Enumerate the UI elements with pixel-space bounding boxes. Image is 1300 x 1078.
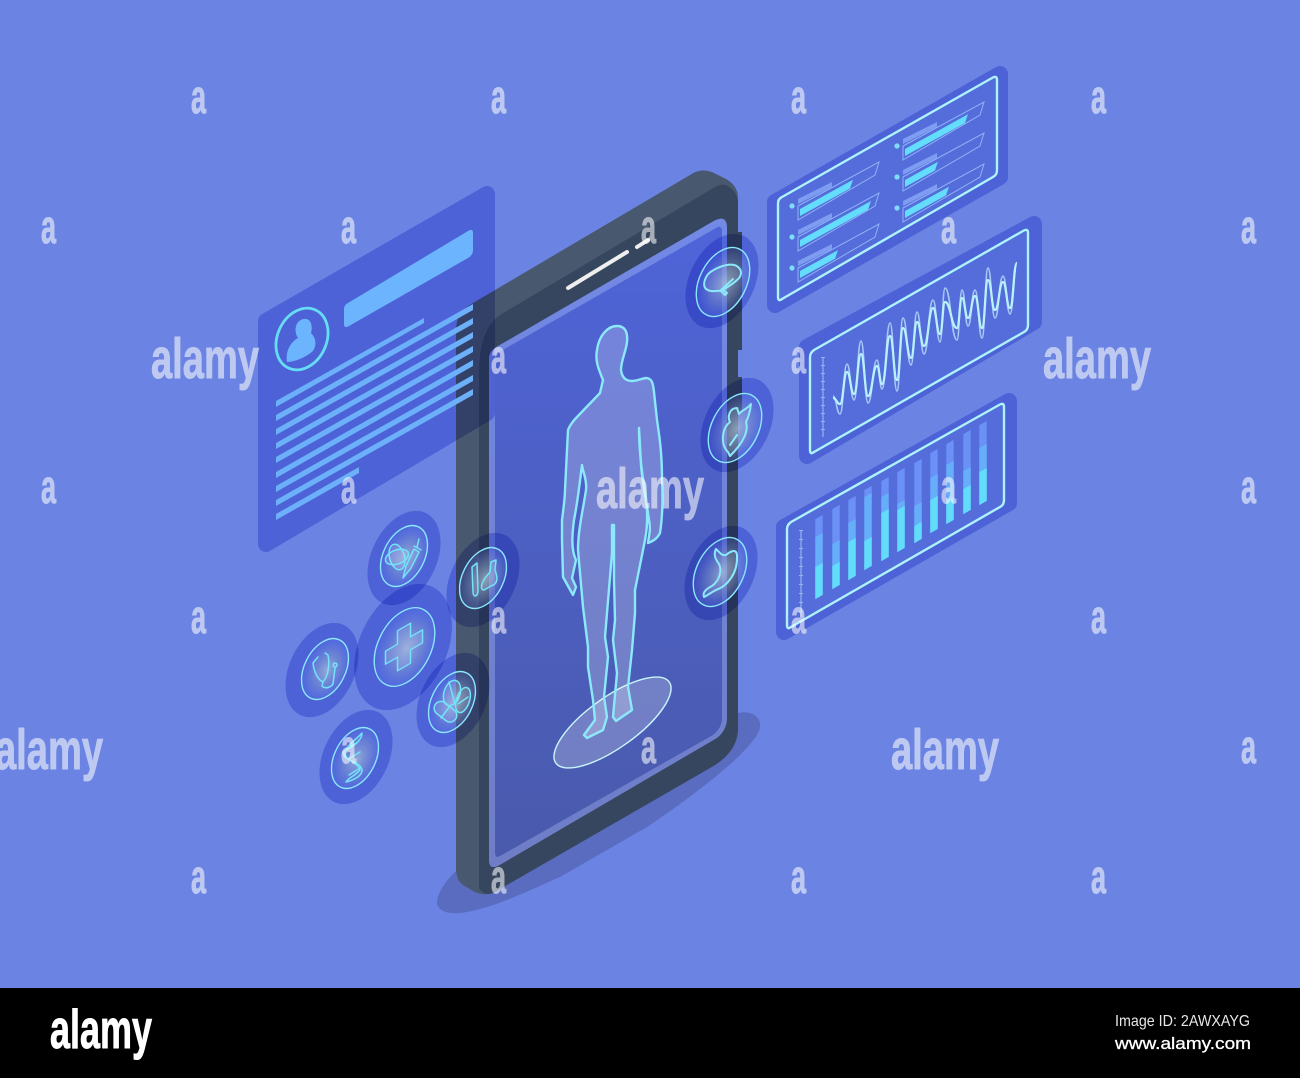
watermarks: small a grid: a <box>1091 70 1106 123</box>
watermarks: alamy: alamy <box>891 718 999 782</box>
card <box>807 224 1034 456</box>
frame <box>787 404 1004 628</box>
record card <box>266 194 487 544</box>
phone shadow <box>437 712 760 913</box>
axis ticks <box>799 530 803 617</box>
phone side buttons <box>738 232 742 412</box>
panel: progress bars <box>775 74 1000 305</box>
title bar <box>344 230 473 327</box>
speaker slot <box>568 240 648 288</box>
watermarks: small a grid: a <box>491 70 506 123</box>
watermarks: small a grid: a <box>491 590 506 643</box>
watermarks: small a grid: a <box>1091 590 1106 643</box>
frame <box>810 230 1028 453</box>
watermarks: small a grid: a <box>341 200 356 253</box>
disc: flask and test tube <box>432 521 534 639</box>
watermarks: alamy: alamy <box>151 327 259 391</box>
axis <box>822 357 824 437</box>
avatar ring <box>266 300 338 378</box>
watermarks: small a grid: a <box>791 70 806 123</box>
panel: stacked bar chart <box>784 401 1009 632</box>
card <box>775 74 1000 305</box>
disc: DNA <box>305 698 407 816</box>
watermarks: small a grid: a <box>791 330 806 383</box>
phone body side <box>456 171 738 894</box>
screen <box>495 227 722 857</box>
watermarks: small a grid: a <box>191 590 206 643</box>
row 6 <box>894 164 984 222</box>
watermarks: small a grid: a <box>491 330 506 383</box>
icon group: medical discs <box>271 222 788 816</box>
footer bar <box>0 988 1300 1078</box>
footer logo: alamy <box>50 998 152 1060</box>
watermarks: small a grid: a <box>641 720 656 773</box>
avatar person <box>287 319 315 362</box>
human silhouette <box>562 326 662 738</box>
disc: bandage and syringe <box>353 499 455 617</box>
watermarks: small a grid: a <box>1241 720 1256 773</box>
watermarks: small a grid: a <box>191 850 206 903</box>
website: www.alamy.com <box>1114 1034 1251 1053</box>
watermarks: small a grid: a <box>791 850 806 903</box>
frame <box>778 77 997 300</box>
watermarks: small a grid: a <box>341 720 356 773</box>
watermarks: small a grid: a <box>191 70 206 123</box>
disc: stethoscope <box>271 611 373 729</box>
row 2 <box>789 193 879 251</box>
axis ticks <box>821 357 825 437</box>
main wave <box>833 263 1017 404</box>
body scan figure <box>541 326 684 784</box>
watermarks: small a grid: a <box>641 200 656 253</box>
watermarks: small a grid: a <box>941 200 956 253</box>
watermarks: small a grid: a <box>41 200 56 253</box>
disc: brain <box>671 222 773 340</box>
panel: patient record <box>266 194 487 544</box>
disc: pills <box>402 641 504 759</box>
watermarks: small a grid: a <box>341 460 356 513</box>
watermarks: alamy: alamy <box>596 457 704 521</box>
card <box>784 401 1009 632</box>
screen frame <box>489 219 727 867</box>
watermarks: small a grid: a <box>1091 850 1106 903</box>
watermarks: small a grid: a <box>1241 460 1256 513</box>
panel: waveform chart <box>807 224 1034 456</box>
watermarks: small a grid: a <box>941 460 956 513</box>
watermarks: small a grid: a <box>491 850 506 903</box>
bars <box>815 421 987 599</box>
watermarks: small a grid: a <box>1241 200 1256 253</box>
disc: heart <box>686 366 788 484</box>
row 3 <box>789 224 879 282</box>
watermarks: small a grid: a <box>41 460 56 513</box>
watermarks: alamy <box>0 327 1151 782</box>
disc: stomach <box>670 514 772 632</box>
text lines <box>276 304 473 520</box>
scan platform <box>541 661 684 784</box>
watermarks: alamy: alamy <box>1043 327 1151 391</box>
smartphone <box>456 171 742 894</box>
watermarks: small a grid: a <box>791 590 806 643</box>
phone front face <box>479 185 738 894</box>
image id: Image ID: 2AWXAYG <box>1115 1013 1250 1030</box>
secondary wave <box>833 263 1017 414</box>
axis <box>800 530 802 617</box>
row 1 <box>789 162 879 220</box>
row 5 <box>894 133 984 191</box>
watermarks: small a grid <box>41 70 1256 903</box>
row 4 <box>894 102 984 160</box>
disc: medical cross <box>335 568 471 726</box>
